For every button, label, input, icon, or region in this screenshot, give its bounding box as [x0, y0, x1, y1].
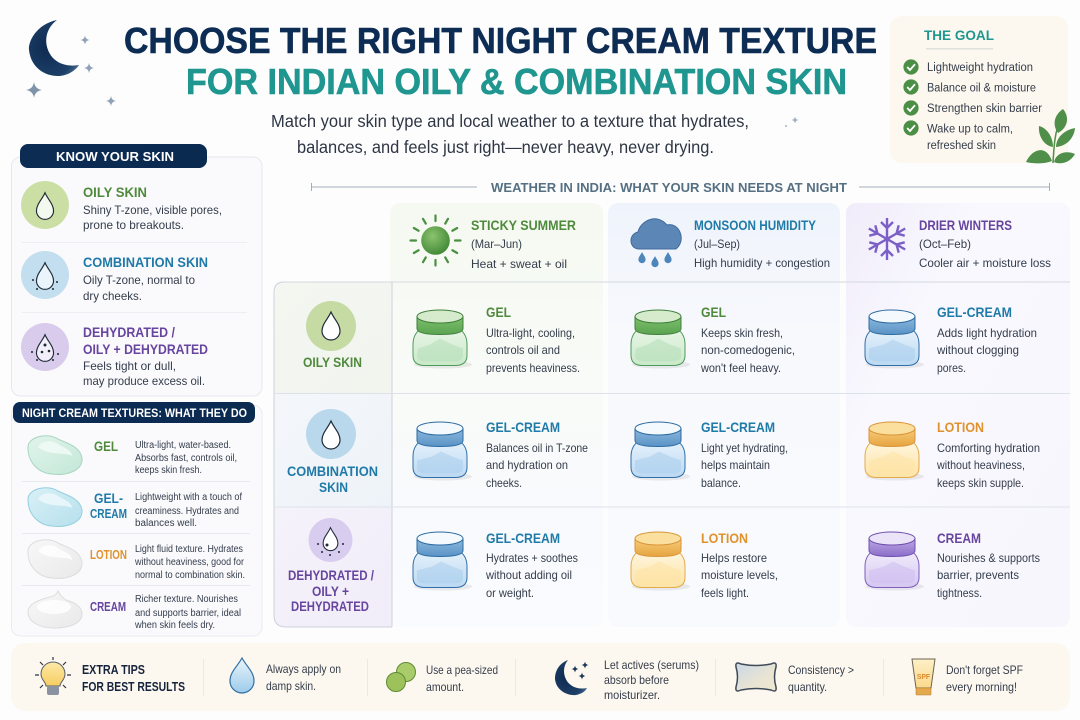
heading: extra tips: FOR BEST RESULTS: [82, 679, 185, 694]
skin type: dehydrated: Feels tight or dull,: [83, 359, 176, 373]
cell: dehydrated winter cream: tightness.: [937, 586, 982, 600]
cell: combination monsoon gel-cream: [631, 419, 788, 490]
subtitle: balances, and feels just right—never heavy, never drying.: [297, 137, 714, 157]
texture: cream: [28, 591, 241, 631]
tip: let actives absorb: Let actives (serums): [604, 658, 699, 672]
texture: gel: keeps skin fresh.: [135, 465, 202, 476]
skin type: combination: Oily T-zone, normal to: [83, 273, 195, 287]
texture: gel-cream: balances well.: [135, 518, 197, 529]
icon: rain cloud: [631, 219, 681, 267]
column header: drier winters: DRIER WINTERS: [919, 217, 1012, 233]
cell: oily summer gel: [413, 304, 580, 375]
skin type: combination: [21, 251, 208, 303]
tip: consistency pillow: quantity.: [788, 680, 827, 694]
cell: combination summer gel-cream: Balances oil in T-zone: [486, 441, 588, 455]
cell: oily summer gel: prevents heaviness.: [486, 361, 580, 375]
cell: dehydrated monsoon lotion: moisture levels,: [701, 568, 778, 582]
texture: cream: when skin feels dry.: [134, 620, 215, 631]
row label: dehydrated: OILY +: [312, 583, 349, 599]
skin type: oily: prone to breakouts.: [83, 218, 184, 232]
column header: monsoon humidity: MONSOON HUMIDITY: [694, 217, 817, 233]
skin type: combination: COMBINATION SKIN: [83, 254, 208, 270]
cell: combination winter lotion: keeps skin supple.: [937, 476, 1024, 490]
tip: pea-sized: amount.: [426, 680, 464, 694]
texture: gel-cream: Lightweight with a touch of: [135, 492, 242, 503]
tip: pea-sized: Use a pea-sized: [426, 663, 498, 677]
cell: dehydrated winter cream: barrier, prevents: [937, 568, 1019, 582]
texture: gel: Ultra-light, water-based.: [135, 440, 231, 451]
texture: cream: and supports barrier, ideal: [135, 608, 241, 619]
skin type: combination: dry cheeks.: [83, 289, 142, 303]
cell: dehydrated summer gel-cream: GEL-CREAM: [486, 530, 560, 546]
goal checklist: Balance oil & moisture: [927, 82, 1036, 94]
cell: oily monsoon gel: won't feel heavy.: [700, 361, 781, 375]
cell: oily monsoon gel: Keeps skin fresh,: [701, 326, 783, 340]
row label: combination skin: [287, 409, 378, 495]
tip: damp skin: Always apply on: [266, 662, 341, 676]
row label: combination skin: COMBINATION: [287, 463, 378, 479]
texture: cream: CREAM: [90, 599, 126, 614]
cell: combination summer gel-cream: and hydration on: [486, 458, 568, 472]
cell: combination summer gel-cream: [413, 419, 588, 490]
column header: sticky summer: [410, 216, 576, 271]
heading pill: textures: NIGHT CREAM TEXTURES: WHAT THEY DO: [22, 408, 247, 420]
heading: weather in India: WEATHER IN INDIA: WHAT YOUR SKIN NEEDS AT NIGHT: [491, 181, 847, 195]
texture: gel-cream: GEL-: [94, 490, 123, 506]
tip: pea-sized: [386, 662, 498, 694]
tip: damp skin: [230, 658, 341, 693]
cell: oily winter gel-cream: Adds light hydration: [937, 326, 1037, 340]
column header: sticky summer: (Mar–Jun): [471, 237, 522, 251]
column header: sticky summer: STICKY SUMMER: [471, 217, 576, 233]
icon: snowflake: [866, 218, 908, 260]
column header: sticky summer: Heat + sweat + oil: [471, 257, 567, 271]
cell: oily winter gel-cream: without clogging: [936, 343, 1019, 357]
icon: light bulb: [35, 657, 71, 695]
cell: combination winter lotion: LOTION: [937, 419, 984, 435]
texture: gel-cream: creaminess. Hydrates and: [135, 506, 239, 517]
panel: know your skin: [12, 144, 262, 396]
tip: SPF tube: every morning!: [946, 680, 1017, 694]
cell: oily summer gel: GEL: [486, 304, 511, 320]
panel: extra tips: [11, 643, 1070, 711]
cell: combination summer gel-cream: GEL-CREAM: [486, 419, 560, 435]
row label: oily skin: [303, 301, 362, 370]
cell: oily monsoon gel: GEL: [701, 304, 726, 320]
column header: monsoon humidity: (Jul–Sep): [694, 237, 740, 251]
cell: dehydrated monsoon lotion: Helps restore: [701, 551, 767, 565]
tip: consistency pillow: Consistency >: [788, 663, 854, 677]
skin type: oily: [21, 181, 222, 232]
cell: combination monsoon gel-cream: helps maintain: [701, 458, 770, 472]
cell: dehydrated summer gel-cream: Hydrates + soothes: [486, 551, 578, 565]
cell: dehydrated summer gel-cream: or weight.: [486, 586, 534, 600]
cell: combination monsoon gel-cream: balance.: [701, 476, 741, 490]
goal checklist: Wake up to calm,: [927, 124, 1013, 136]
heading pill: know your skin: [20, 144, 207, 168]
panel: night cream textures: [12, 402, 262, 636]
tip: let actives absorb: [555, 658, 699, 702]
cell: dehydrated monsoon lotion: feels light.: [701, 586, 749, 600]
cell: dehydrated winter cream: [865, 530, 1040, 600]
title: CHOOSE THE RIGHT NIGHT CREAM TEXTURE: [124, 20, 877, 61]
cell: combination winter lotion: without heaviness,: [936, 458, 1025, 472]
heading: extra tips: EXTRA TIPS: [82, 662, 145, 677]
column header: drier winters: (Oct–Feb): [919, 237, 971, 251]
column header: monsoon humidity: High humidity + congestion: [694, 256, 830, 270]
heading: the goal: THE GOAL: [924, 27, 994, 43]
tip: consistency pillow: [736, 663, 854, 694]
texture: gel-cream: [28, 488, 242, 529]
texture: lotion: without heaviness, good for: [134, 557, 245, 568]
tip: SPF tube: SPF: [917, 674, 931, 681]
tip: SPF tube: Don't forget SPF: [946, 663, 1023, 677]
cell: dehydrated summer gel-cream: [413, 530, 578, 600]
cell: dehydrated monsoon lotion: LOTION: [701, 530, 748, 546]
texture: cream: Richer texture. Nourishes: [135, 594, 238, 605]
icon: small sparkle: [785, 116, 798, 127]
tip: let actives absorb: absorb before: [604, 673, 669, 687]
cell: combination winter lotion: Comforting hydration: [937, 441, 1040, 455]
goal checklist: [903, 59, 1042, 152]
skin type: dehydrated: may produce excess oil.: [83, 374, 205, 388]
column header: drier winters: Cooler air + moisture loss: [919, 256, 1051, 270]
heading pill: textures: [13, 402, 255, 423]
cell: oily summer gel: Ultra-light, cooling,: [486, 326, 575, 340]
tip: let actives absorb: moisturizer.: [604, 688, 660, 702]
column header: monsoon humidity: [631, 217, 830, 270]
cell: combination monsoon gel-cream: Light yet hydrating,: [701, 441, 788, 455]
texture: lotion: Light fluid texture. Hydrates: [135, 544, 243, 555]
subtitle: [271, 111, 749, 157]
texture: lotion: [28, 540, 245, 581]
heading pill: know your skin: KNOW YOUR SKIN: [56, 150, 174, 164]
goal checklist: Strengthen skin barrier: [927, 103, 1042, 115]
heading: extra tips: [82, 662, 185, 694]
texture: gel: [28, 436, 237, 476]
row label: dehydrated: DEHYDRATED: [291, 598, 369, 614]
row label: combination skin: SKIN: [319, 479, 348, 495]
icon: crescent moon and stars: [26, 20, 116, 106]
tip: damp skin: damp skin.: [266, 679, 316, 693]
cell: dehydrated monsoon lotion: [631, 530, 778, 600]
icon: plant: [1026, 109, 1075, 163]
cell: dehydrated winter cream: CREAM: [937, 530, 981, 546]
title: [124, 20, 877, 102]
panel: row labels: [274, 282, 1070, 627]
title: FOR INDIAN OILY & COMBINATION SKIN: [186, 61, 847, 102]
panel: the goal: [890, 16, 1075, 163]
skin type: dehydrated: DEHYDRATED /: [83, 324, 175, 340]
skin type: dehydrated: [21, 323, 208, 388]
row label: dehydrated: [288, 518, 374, 614]
texture: gel-cream: CREAM: [90, 506, 127, 521]
cell: oily winter gel-cream: pores.: [937, 361, 966, 375]
cell: oily monsoon gel: non-comedogenic,: [701, 343, 795, 357]
texture: lotion: normal to combination skin.: [135, 570, 245, 581]
cell: oily summer gel: controls oil and: [486, 343, 560, 357]
row label: oily skin: OILY SKIN: [303, 354, 362, 370]
skin type: oily: OILY SKIN: [83, 184, 147, 200]
tip: SPF tube: [912, 659, 1023, 695]
row label: dehydrated: DEHYDRATED /: [288, 567, 374, 583]
cell: combination winter lotion: [865, 419, 1040, 490]
subtitle: Match your skin type and local weather to a texture that hydrates,: [271, 111, 749, 131]
cell: combination summer gel-cream: cheeks.: [486, 476, 522, 490]
icon: sun: [410, 216, 460, 266]
texture: gel: Absorbs fast, controls oil,: [135, 453, 237, 464]
cell: dehydrated winter cream: Nourishes & supports: [937, 551, 1040, 565]
skin type: dehydrated: OILY + DEHYDRATED: [83, 341, 208, 357]
cell: oily monsoon gel: [631, 304, 795, 375]
texture: lotion: LOTION: [90, 547, 127, 562]
goal checklist: Lightweight hydration: [927, 62, 1033, 74]
cell: oily winter gel-cream: [865, 304, 1037, 375]
cell: combination monsoon gel-cream: GEL-CREAM: [701, 419, 775, 435]
cell: dehydrated summer gel-cream: without adding oil: [485, 568, 572, 582]
heading: weather in India: [312, 181, 1050, 195]
skin type: oily: Shiny T-zone, visible pores,: [83, 203, 222, 217]
panel: column backgrounds: [390, 203, 1070, 627]
texture: gel: GEL: [94, 438, 118, 454]
cell: oily winter gel-cream: GEL-CREAM: [937, 304, 1012, 320]
column header: drier winters: [866, 217, 1051, 270]
goal checklist: refreshed skin: [927, 140, 996, 152]
